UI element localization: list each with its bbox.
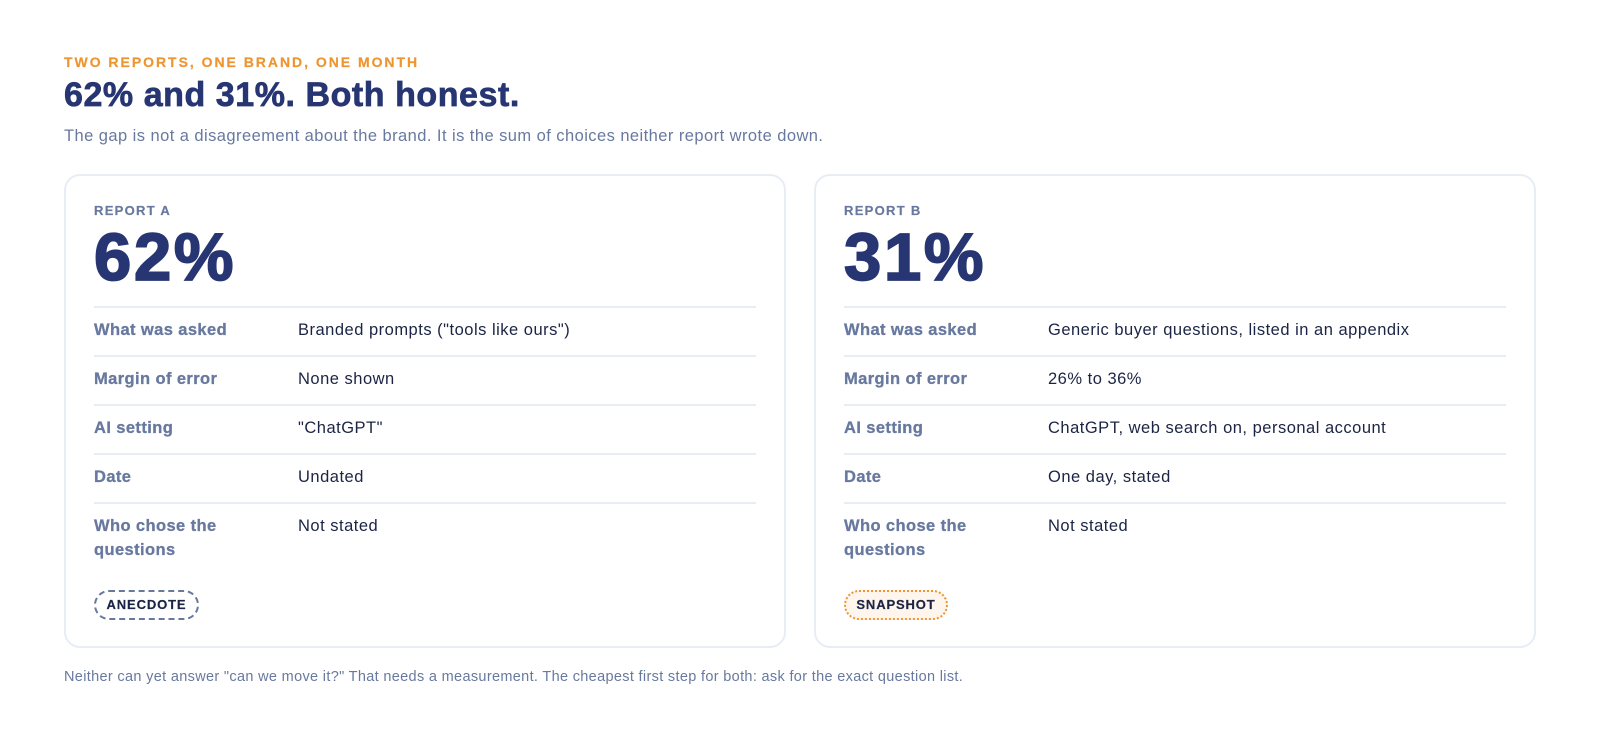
report B figure: 31% (844, 220, 986, 295)
report B label: REPORT B (844, 203, 922, 218)
row label: date: Date (844, 468, 881, 486)
row value: who chose the questions: Not stated (298, 517, 378, 535)
row label: who chose the questions (844, 517, 967, 559)
row label: margin of error: Margin of error (94, 370, 217, 388)
report A figure: 62% (94, 220, 236, 295)
badge: snapshot (844, 590, 948, 620)
subtitle: The gap is not a disagreement about the brand. It is the sum of choices neither report wrote down. (64, 127, 823, 145)
row label: what was asked: What was asked (94, 321, 227, 339)
row value: what was asked: Generic buyer questions, listed in an appendix (1048, 321, 1409, 339)
row value: date: Undated (298, 468, 364, 486)
badge: anecdote (94, 590, 199, 620)
footnote: Neither can yet answer "can we move it?" That needs a measurement. The cheapest first step for both: ask for the exact question list. (64, 669, 963, 685)
row value: margin of error: 26% to 36% (1048, 370, 1142, 388)
badge: snapshot: SNAPSHOT (856, 597, 936, 612)
panel: report A (64, 174, 786, 648)
row value: margin of error: None shown (298, 370, 395, 388)
row value: AI setting: "ChatGPT" (298, 419, 383, 437)
row label: who chose the questions: questions (94, 540, 176, 558)
badge: anecdote: ANECDOTE (107, 597, 186, 612)
row label: who chose the questions (94, 517, 217, 559)
eyebrow: TWO REPORTS, ONE BRAND, ONE MONTH (64, 54, 419, 70)
row value: who chose the questions: Not stated (1048, 517, 1128, 535)
row value: date: One day, stated (1048, 468, 1171, 486)
panel: report B (814, 174, 1536, 648)
row label: what was asked: What was asked (844, 321, 977, 339)
row label: who chose the questions: questions (844, 540, 926, 558)
row label: who chose the questions: Who chose the (94, 517, 217, 535)
row value: AI setting: ChatGPT, web search on, personal account (1048, 419, 1386, 437)
row label: AI setting: AI setting (844, 419, 923, 437)
row label: date: Date (94, 468, 131, 486)
row label: margin of error: Margin of error (844, 370, 967, 388)
row label: AI setting: AI setting (94, 419, 173, 437)
report A label: REPORT A (94, 203, 171, 218)
title: 62% and 31%. Both honest. (64, 76, 520, 114)
row value: what was asked: Branded prompts ("tools like ours") (298, 321, 570, 339)
row label: who chose the questions: Who chose the (844, 517, 967, 535)
